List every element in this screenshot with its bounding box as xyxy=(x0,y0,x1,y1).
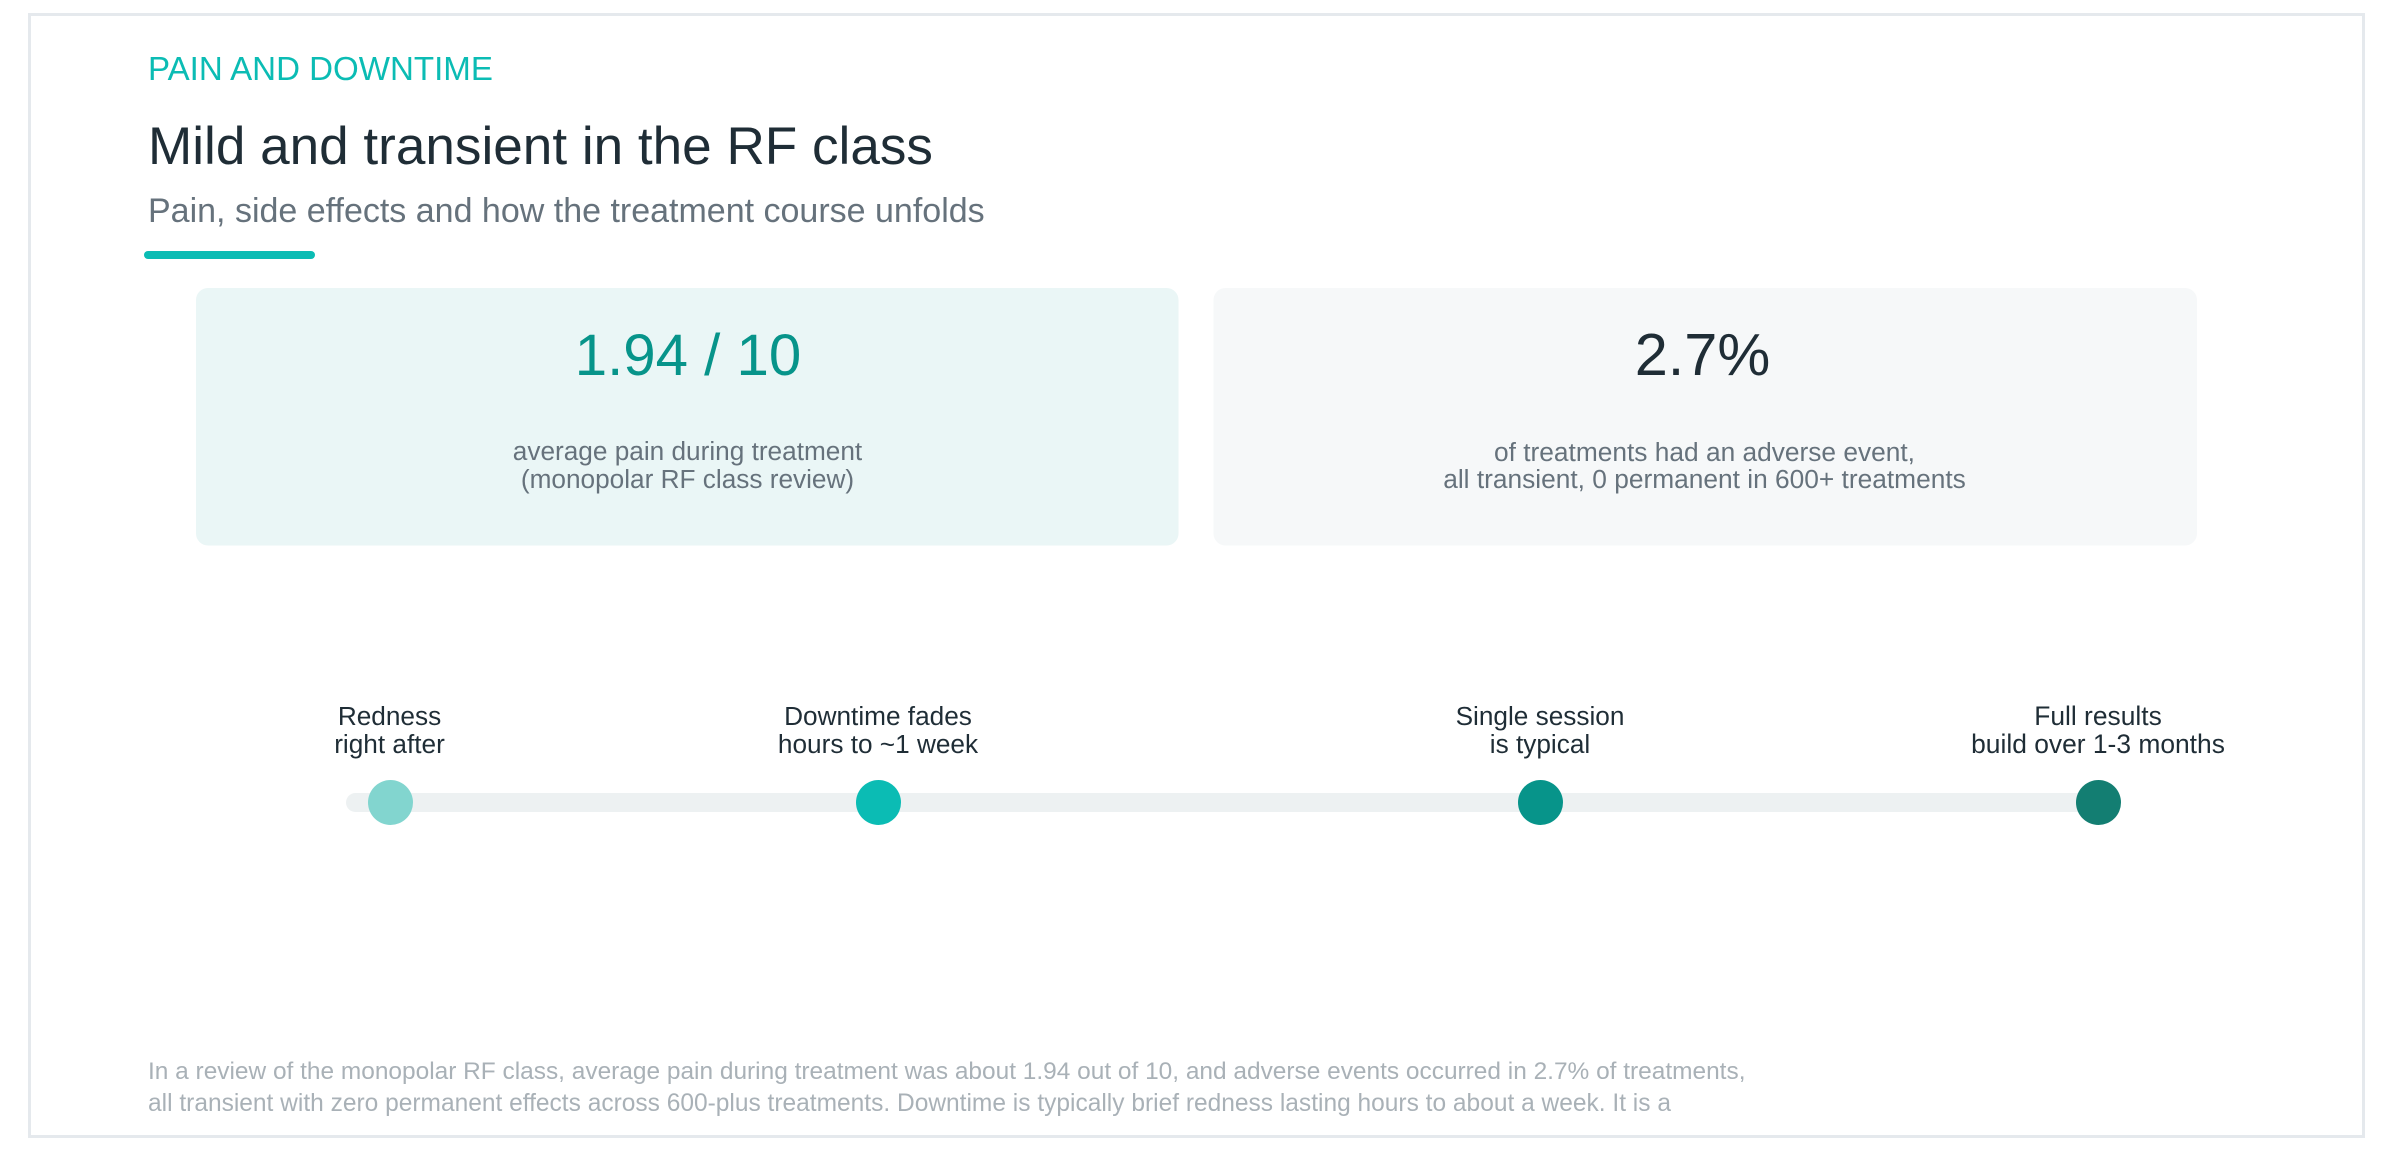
step: redness: Redness xyxy=(338,701,441,731)
panel: average pain xyxy=(196,288,1178,546)
adverse event description: of treatments had an adverse event, xyxy=(1494,437,1915,467)
step: single session: is typical xyxy=(1490,729,1590,759)
panel: adverse events xyxy=(1214,288,2197,546)
adverse event metric: 2.7% xyxy=(1635,321,1770,388)
subtitle: Pain, side effects and how the treatment course unfolds xyxy=(148,192,985,230)
header xyxy=(144,51,985,259)
pain description: (monopolar RF class review) xyxy=(521,464,854,494)
step: redness: right after xyxy=(334,729,445,759)
eyebrow: PAIN AND DOWNTIME xyxy=(148,51,493,88)
step: single session xyxy=(1456,701,1624,825)
timeline xyxy=(334,701,2225,825)
pain description: average pain during treatment xyxy=(513,436,863,466)
step: downtime fades: Downtime fades xyxy=(784,701,972,731)
title: Mild and transient in the RF class xyxy=(148,117,933,176)
step: redness xyxy=(334,701,445,825)
step: full results: Full results xyxy=(2034,701,2162,731)
step: downtime fades xyxy=(778,701,979,825)
accent bar xyxy=(144,251,315,259)
timeline track xyxy=(346,793,2098,812)
adverse event description: all transient, 0 permanent in 600+ treatments xyxy=(1443,464,1966,494)
pain metric: 1.94 / 10 xyxy=(575,323,801,388)
step: single session: Single session xyxy=(1456,701,1624,731)
footer note: In a review of the monopolar RF class, average pain during treatment was about 1.94 out of 10, and adverse events occurred in 2.7% of treatments, xyxy=(148,1058,1745,1085)
step: full results xyxy=(1971,701,2225,825)
step: full results: build over 1-3 months xyxy=(1971,729,2225,759)
footer note: all transient with zero permanent effects across 600-plus treatments. Downtime is typically brief redness lasting hours to about a week. It is a xyxy=(148,1090,1671,1117)
step: downtime fades: hours to ~1 week xyxy=(778,729,979,759)
